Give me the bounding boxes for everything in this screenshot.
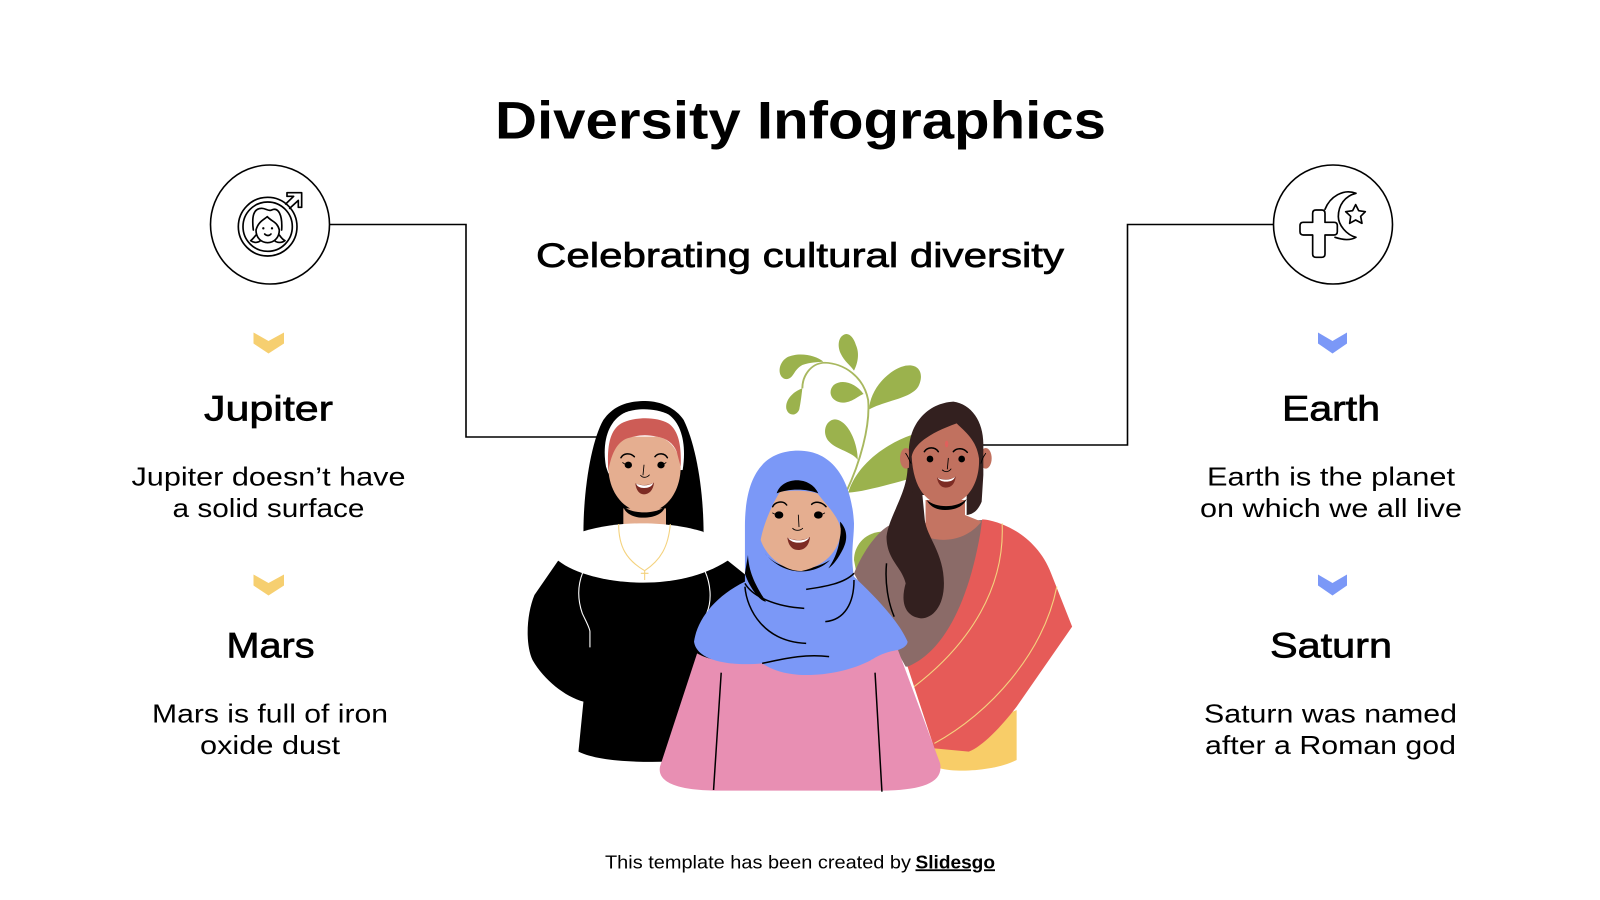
text: Earth description [1200, 462, 1462, 523]
heading: Saturn: Saturn [1270, 627, 1392, 666]
text: Jupiter description: Jupiter doesn’t have [132, 462, 406, 492]
text: Saturn description [1204, 698, 1457, 760]
subtitle: Celebrating cultural diversity [536, 237, 1064, 275]
text: Earth description: on which we all live [1200, 493, 1462, 523]
text: Jupiter description: a solid surface [172, 493, 364, 523]
text: Saturn description: after a Roman god [1205, 730, 1456, 760]
icon: cross, moon and star [1274, 165, 1392, 284]
woman: red sari [854, 402, 1072, 771]
chevron: Jupiter [254, 332, 284, 354]
text: Mars description: oxide dust [200, 730, 341, 760]
heading: Jupiter: Jupiter [204, 390, 333, 429]
connector: left icon to illustration [329, 224, 600, 437]
heading: Earth: Earth [1282, 390, 1380, 429]
title: Diversity Infographics [495, 92, 1106, 150]
footer credit: This template has been created by [605, 851, 912, 872]
text: Earth description: Earth is the planet [1207, 462, 1456, 492]
text: Jupiter description [132, 462, 406, 523]
chevron: Saturn [1318, 574, 1347, 596]
footer credit: Slidesgo [916, 851, 995, 872]
illustration: three women and a plant [528, 334, 1072, 792]
chevron: Earth [1318, 332, 1347, 354]
connector: right icon to illustration [980, 224, 1273, 445]
woman: blue hijab [660, 451, 941, 792]
text: Mars description [152, 698, 388, 760]
plant [780, 334, 921, 570]
text: Mars description: Mars is full of iron [152, 698, 388, 728]
text: Saturn description: Saturn was named [1204, 698, 1457, 728]
heading: Mars: Mars [226, 627, 314, 666]
chevron: Mars [254, 574, 284, 596]
icon: gender symbol with face [210, 165, 330, 284]
woman: nun [528, 401, 760, 762]
